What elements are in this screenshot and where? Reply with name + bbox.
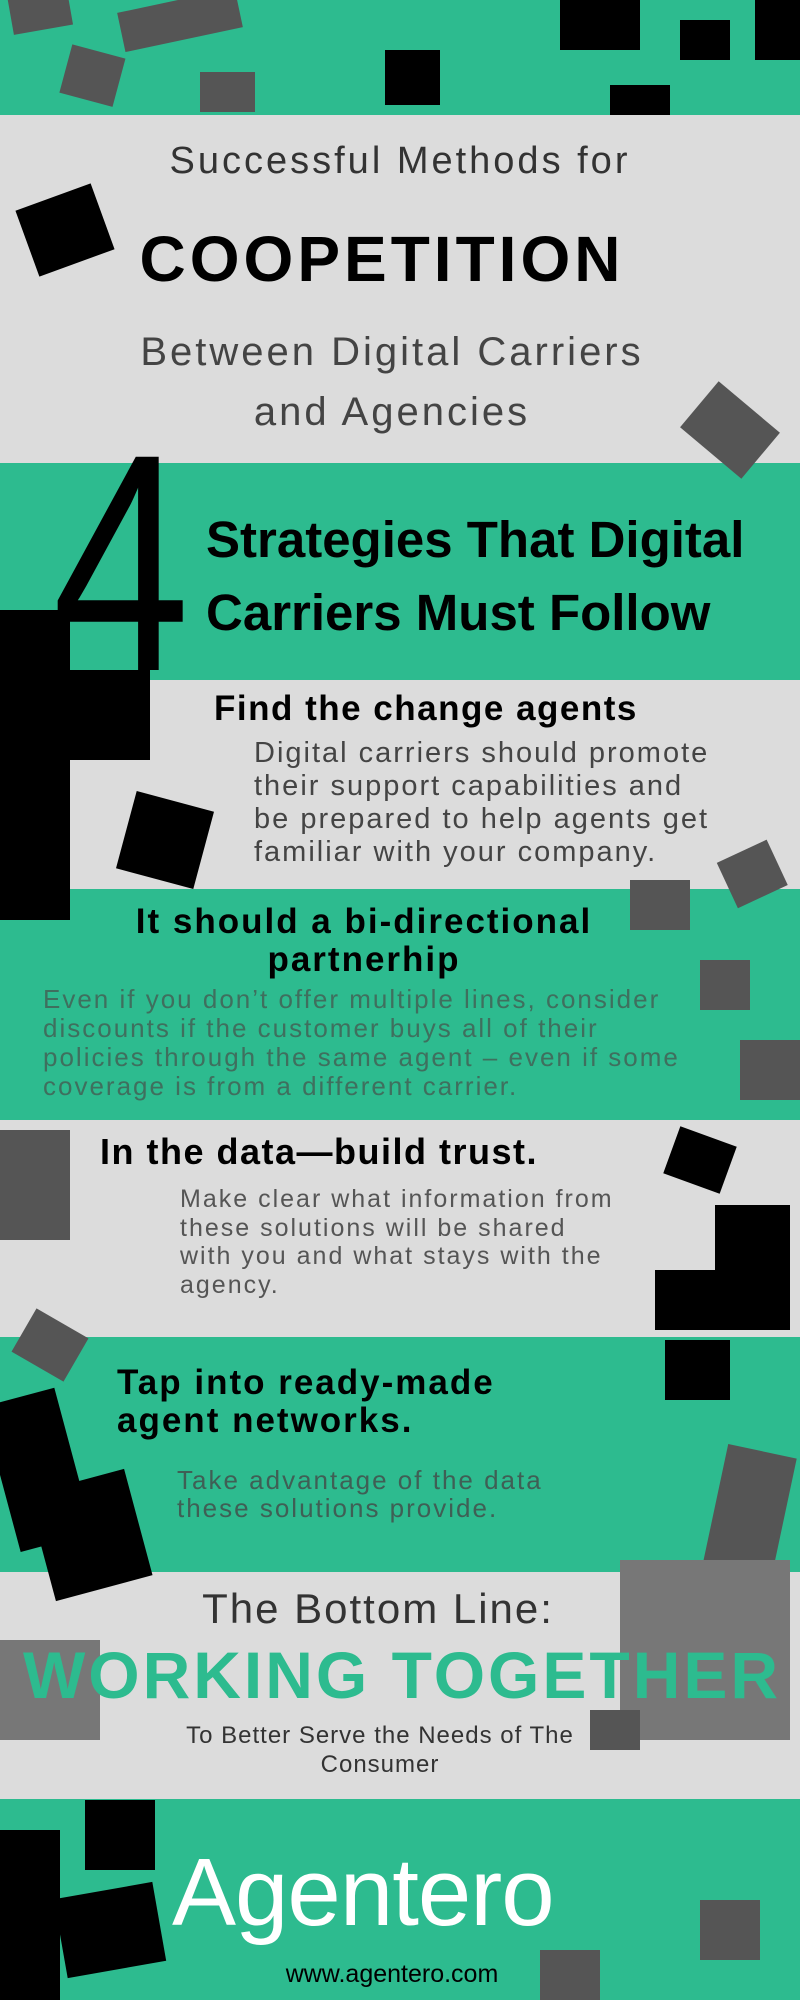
body 1: Digital carriers should promote: [254, 737, 709, 769]
body 2: [43, 984, 680, 1101]
body 4: these solutions provide.: [177, 1493, 498, 1523]
body 2: Even if you don’t offer multiple lines, consider: [43, 984, 660, 1014]
strategies heading: Carriers Must Follow: [206, 584, 710, 641]
body 4: Take advantage of the data: [177, 1465, 543, 1495]
body 1: familiar with your company.: [254, 836, 657, 868]
heading 4: Tap into ready-made: [117, 1363, 495, 1402]
body 3: Make clear what information from: [180, 1185, 614, 1213]
body 3: agency.: [180, 1270, 280, 1298]
heading 2: [136, 902, 592, 979]
body 2: policies through the same agent – even if some: [43, 1042, 680, 1072]
body 3: [180, 1185, 614, 1298]
subtitle: Between Digital Carriers: [140, 330, 644, 374]
bottom subtext: [186, 1722, 574, 1778]
body 4: [177, 1465, 543, 1523]
strategy 2: [43, 902, 680, 1101]
heading 1: Find the change agents: [214, 689, 638, 728]
website: www.agentero.com: [286, 1960, 498, 1988]
strategy 4: [117, 1363, 543, 1523]
body 3: with you and what stays with the: [180, 1242, 603, 1270]
heading 2: partnerhip: [267, 940, 461, 979]
big number 4: 4: [52, 389, 190, 736]
strategy 1: [214, 689, 709, 868]
subtitle: and Agencies: [254, 390, 530, 434]
heading: successful methods: Successful Methods for: [170, 140, 630, 182]
bottom subtext: Consumer: [321, 1751, 439, 1778]
body 1: be prepared to help agents get: [254, 803, 709, 835]
heading 3: In the data—build trust.: [100, 1131, 538, 1172]
strategy 3: [100, 1131, 614, 1298]
body 3: these solutions will be shared: [180, 1214, 567, 1242]
body 2: discounts if the customer buys all of their: [43, 1013, 599, 1043]
bottom subtext: To Better Serve the Needs of The: [186, 1722, 574, 1749]
heading 4: [117, 1363, 495, 1440]
body 1: [254, 737, 709, 868]
strategies heading: [206, 511, 744, 641]
strategies heading: Strategies That Digital: [206, 511, 744, 568]
body 2: coverage is from a different carrier.: [43, 1071, 518, 1101]
heading 4: agent networks.: [117, 1401, 413, 1440]
logo: Agentero: Agentero: [172, 1839, 554, 1946]
working together: WORKING TOGETHER: [23, 1638, 781, 1712]
subtitle: [140, 330, 644, 434]
body 1: their support capabilities and: [254, 770, 683, 802]
heading 2: It should a bi-directional: [136, 902, 592, 941]
title: coopetition: COOPETITION: [140, 223, 624, 295]
bottom line heading: The Bottom Line:: [202, 1585, 554, 1632]
